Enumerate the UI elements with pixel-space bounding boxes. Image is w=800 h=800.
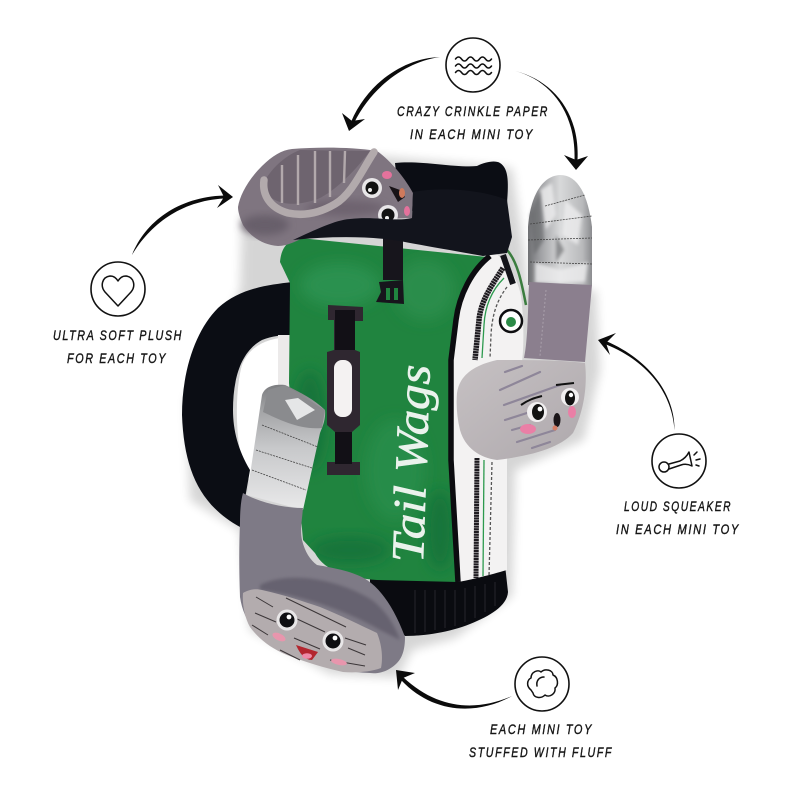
silver shaft (528, 175, 592, 285)
text: crinkle paper: CRAZY CRINKLE PAPER (397, 104, 549, 119)
embroidered brand name: Tail Wags (382, 364, 440, 563)
black piping stripe (451, 256, 490, 582)
collar front (293, 189, 512, 256)
callout: ultra soft plush (53, 185, 233, 366)
fabric shading on green (294, 260, 455, 570)
icon: waves (446, 38, 500, 92)
mini toy: top club head (238, 148, 413, 246)
mini toy: right club (457, 175, 592, 460)
text: plush (53, 328, 183, 366)
white back panel behind handle (278, 335, 292, 390)
text: fluff (469, 722, 613, 760)
club neck and head (239, 493, 405, 673)
text: plush: FOR EACH TOY (67, 351, 167, 366)
text: crinkle paper (397, 104, 549, 142)
side stripes (475, 250, 526, 578)
paw badge (500, 310, 522, 332)
text: plush: ULTRA SOFT PLUSH (53, 328, 183, 343)
club head (457, 360, 586, 460)
groove lines (500, 366, 560, 448)
arrow to lower club (396, 670, 512, 709)
ribbed bag base (370, 565, 508, 636)
text: crinkle paper: IN EACH MINI TOY (410, 127, 534, 142)
face (520, 383, 579, 434)
callout: stuffed with fluff (396, 657, 613, 760)
face (271, 610, 347, 667)
golf bag toy (182, 162, 526, 636)
club head body (238, 148, 413, 246)
white gap inside handle (237, 337, 290, 490)
icon: horn (652, 434, 706, 488)
mini toy: lower left club (239, 385, 405, 673)
text: fluff: EACH MINI TOY (490, 722, 593, 737)
purple neck (524, 282, 592, 362)
shadow behind toy (186, 156, 600, 678)
green bag body (280, 238, 487, 582)
white side panel (450, 254, 523, 582)
groove lines (252, 597, 366, 666)
collar back (395, 162, 508, 215)
arrow to shaft (515, 71, 588, 170)
callout: crinkle paper (342, 38, 588, 170)
arrow to right club head (598, 333, 675, 430)
face plate (243, 589, 382, 672)
text: fluff: STUFFED WITH FLUFF (469, 745, 613, 760)
silver shaft (247, 385, 325, 510)
callout: loud squeaker (598, 333, 740, 537)
arrow to top club (342, 57, 440, 131)
front handle strap (327, 305, 363, 475)
text: squeaker: IN EACH MINI TOY (616, 522, 740, 537)
face on club head (362, 171, 410, 225)
icon: heart (91, 262, 145, 316)
club grooves (263, 150, 370, 204)
icon: fluff cloud (515, 657, 569, 711)
bag handle (182, 282, 292, 527)
arrow to top club head (132, 185, 233, 255)
black strap with buckle (376, 238, 404, 304)
text: squeaker: LOUD SQUEAKER (624, 499, 732, 514)
text: squeaker (616, 499, 740, 537)
